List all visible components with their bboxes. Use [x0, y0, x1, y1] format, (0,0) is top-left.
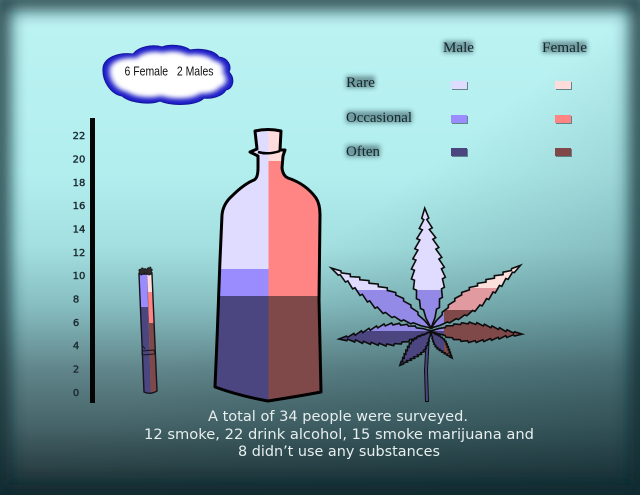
- cloud callout: [103, 45, 233, 104]
- legend row: often: Often: [346, 144, 381, 160]
- axis tick labels: 4: [73, 341, 79, 352]
- cigarette ash: [139, 267, 152, 275]
- axis tick labels: 8: [73, 294, 79, 306]
- axis tick labels: 14: [73, 224, 85, 236]
- cigarette outline: [139, 274, 157, 393]
- axis tick labels: 0: [73, 388, 79, 399]
- legend heading: female: Female: [542, 40, 587, 56]
- axis tick labels: 22: [73, 131, 85, 142]
- bottle fills: [216, 131, 320, 400]
- axis tick labels: 6: [73, 318, 79, 329]
- bottle cork line: [258, 151, 280, 153]
- axis tick labels: 18: [73, 178, 85, 189]
- bottle outline: [215, 130, 321, 401]
- cloud label: 6 Female 2 Males: [124, 64, 214, 78]
- axis scale: [73, 118, 95, 403]
- legend glow: [346, 41, 587, 157]
- leaf outlines: [325, 207, 527, 371]
- icon: bottle chart: [214, 128, 322, 402]
- survey summary text: 12 smoke, 22 drink alcohol, 15 smoke marijuana and: [144, 427, 534, 443]
- legend swatches: [451, 81, 572, 157]
- legend row: occasional: Occasional: [346, 110, 412, 126]
- icon: marijuana leaf chart: [325, 200, 534, 402]
- axis tick labels: 20: [73, 154, 85, 166]
- leaf stem: [426, 335, 428, 402]
- axis tick labels: 2: [73, 364, 79, 376]
- survey summary text: 8 didn’t use any substances: [238, 444, 440, 460]
- legend row: rare: Rare: [346, 75, 375, 91]
- axis tick labels: 10: [73, 271, 85, 282]
- axis tick labels: 12: [73, 248, 85, 259]
- cigarette band: [142, 346, 155, 355]
- leaf fills: [334, 210, 519, 364]
- legend: [346, 40, 587, 160]
- icon: cigarette chart: [138, 266, 158, 394]
- axis bar: [90, 118, 95, 403]
- legend heading: male: Male: [443, 40, 474, 56]
- survey summary text: A total of 34 people were surveyed.: [208, 409, 468, 425]
- axis tick labels: 16: [73, 201, 85, 212]
- cigarette fills: [140, 274, 156, 393]
- survey summary text: [144, 409, 534, 460]
- axis tick labels: [73, 131, 85, 399]
